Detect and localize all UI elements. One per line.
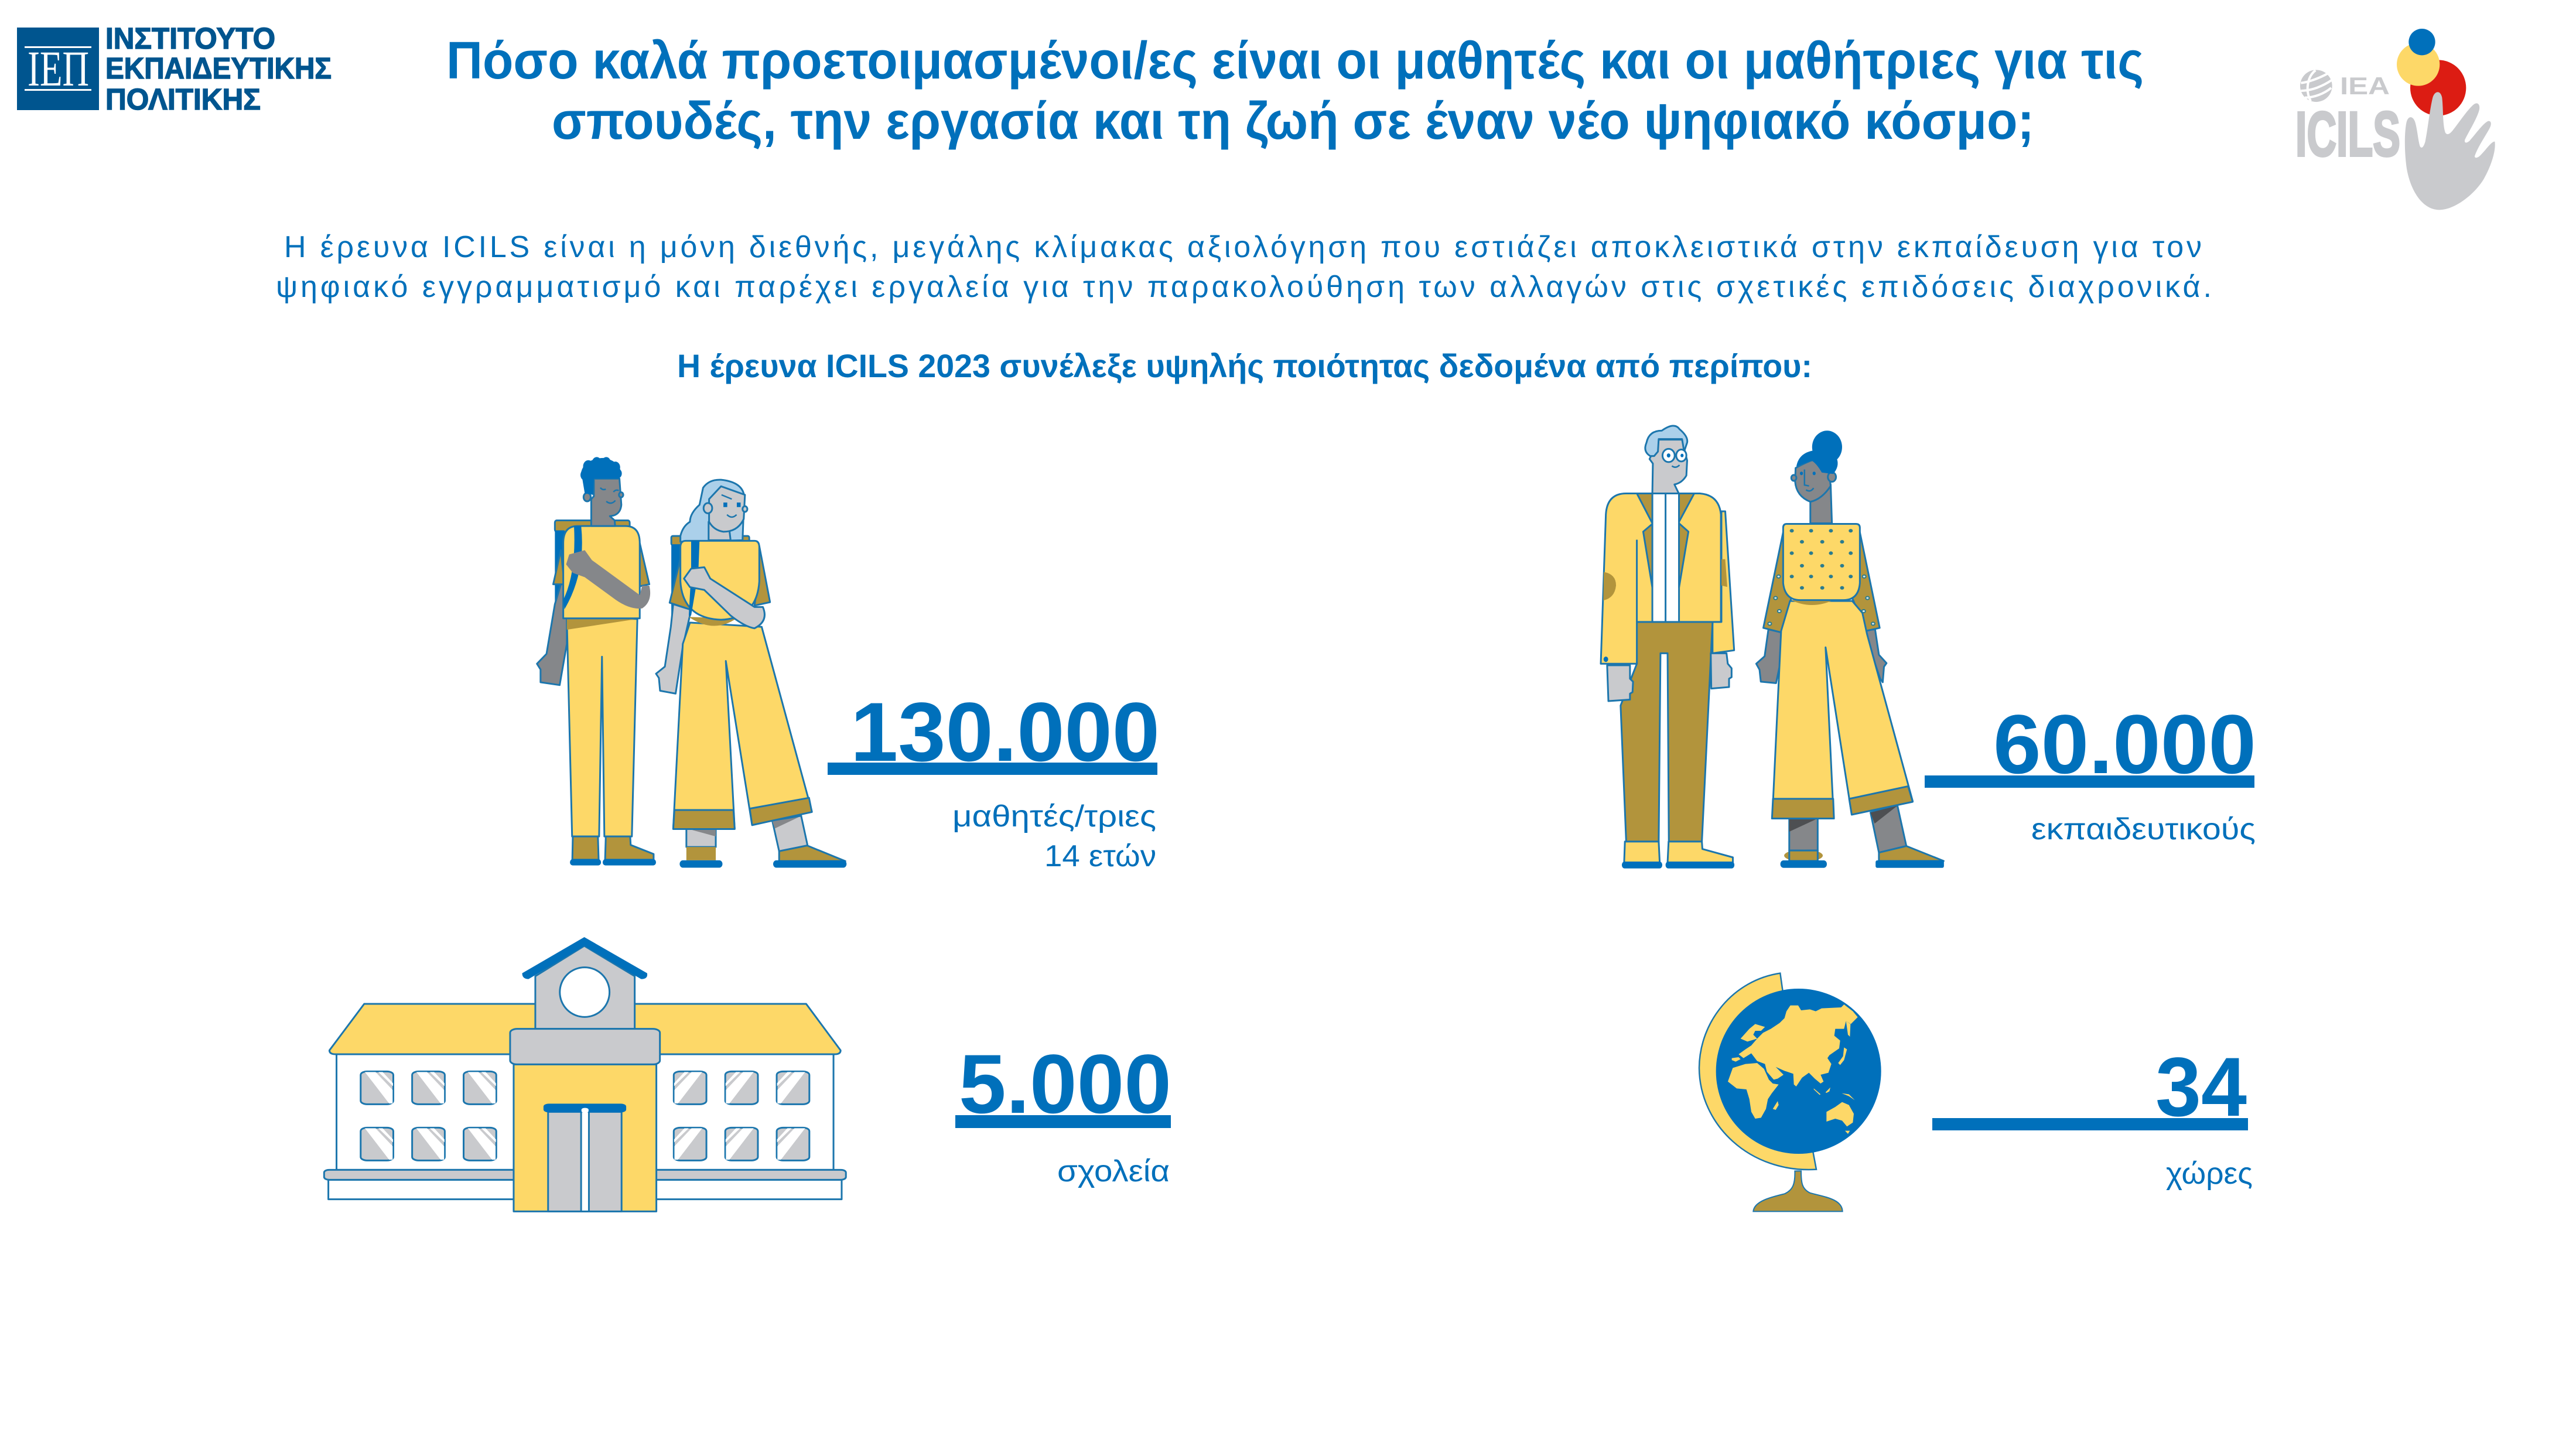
rule	[828, 763, 1157, 775]
globe arc	[1699, 973, 1816, 1170]
intro paragraph: Η έρευνα ICILS είναι η μόνη διεθνής, μεγάλης κλίμακας αξιολόγηση που εστιάζει αποκλειστικά στην εκπαίδευση για τον	[284, 230, 2202, 264]
title: σπουδές, την εργασία και τη ζωή σε έναν νέο ψηφιακό κόσμο;	[552, 92, 2034, 151]
windows	[361, 1071, 809, 1160]
logo mark: IEP square: ΙΕΠ	[28, 40, 89, 97]
clock tower	[510, 937, 660, 1064]
number: 130.000: 130.000	[850, 686, 1160, 779]
number: 34: 34	[2155, 1041, 2247, 1134]
illustration: school building	[324, 937, 846, 1211]
globe stand	[1753, 1171, 1843, 1211]
label: students: μαθητές/τριες	[952, 799, 1156, 833]
stat: students	[828, 686, 1160, 873]
label: countries: χώρες	[2166, 1157, 2253, 1191]
illustration: globe	[1699, 973, 1881, 1211]
number: 5.000: 5.000	[959, 1038, 1171, 1131]
stat: countries	[1932, 1041, 2253, 1191]
logo: IEA ICILS with hand	[2300, 29, 2495, 210]
intro paragraph	[276, 230, 2212, 304]
title	[446, 32, 2144, 151]
globe sphere	[1716, 989, 1881, 1154]
rule	[955, 1115, 1171, 1128]
label: teachers: εκπαιδευτικούς	[2031, 812, 2256, 846]
rule	[1925, 775, 2254, 788]
stat: teachers	[1925, 698, 2256, 846]
title: Πόσο καλά προετοιμασμένοι/ες είναι οι μαθητές και οι μαθήτριες για τις	[446, 32, 2144, 90]
ICILS wordmark: ICILS	[2295, 98, 2400, 169]
logo wordmark: ΠΟΛΙΤΙΚΗΣ	[105, 83, 261, 116]
illustration: teachers	[1601, 426, 1944, 869]
label: students	[952, 799, 1156, 873]
icon: hand	[2405, 92, 2495, 210]
entrance	[514, 1064, 657, 1211]
roof	[329, 1004, 841, 1054]
label: students: 14 ετών	[1044, 839, 1156, 873]
logo wordmark: ΕΚΠΑΙΔΕΥΤΙΚΗΣ	[105, 52, 332, 85]
logo wordmark: ΙΝΣΤΙΤΟΥΤΟ	[105, 22, 275, 55]
student: boy	[537, 457, 656, 866]
building base	[324, 1054, 846, 1199]
icon: coloured circles	[2397, 29, 2466, 116]
logo mark: IEP square	[17, 28, 99, 110]
rule	[1932, 1118, 2248, 1130]
student: girl	[656, 480, 846, 867]
IEA wordmark: IEA	[2340, 72, 2390, 100]
number: 60.000: 60.000	[1993, 698, 2256, 791]
label: schools: σχολεία	[1057, 1154, 1170, 1188]
teacher: woman	[1756, 430, 1944, 868]
intro paragraph: ψηφιακό εγγραμματισμό και παρέχει εργαλεία για την παρακολούθηση των αλλαγών στις σχετικές επιδόσεις διαχρονικά.	[276, 270, 2212, 304]
logo: IEP institute	[17, 22, 332, 116]
illustration: students	[537, 457, 846, 867]
subheading: Η έρευνα ICILS 2023 συνέλεξε υψηλής ποιότητας δεδομένα από περίπου:	[677, 347, 1812, 384]
continents	[1728, 1004, 1858, 1134]
logo wordmark	[105, 22, 332, 116]
teacher: man	[1601, 426, 1734, 869]
stat: schools	[955, 1038, 1171, 1188]
icon: IEA globe	[2300, 70, 2332, 102]
